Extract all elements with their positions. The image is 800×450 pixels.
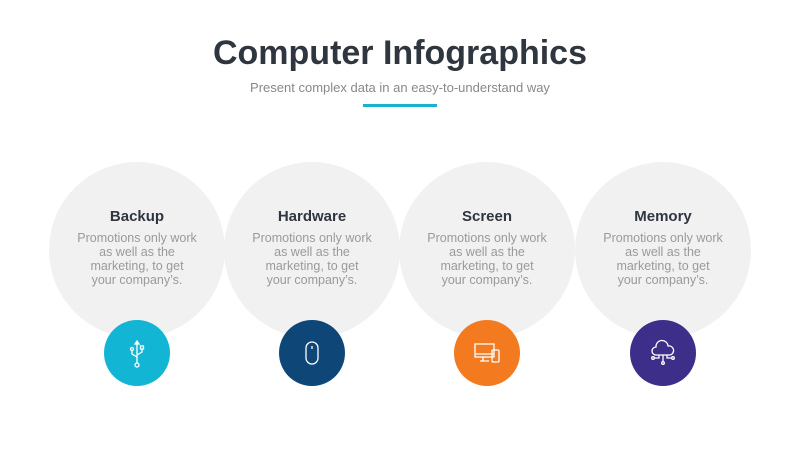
- panel: memory: as well as the: [625, 245, 701, 259]
- icon: cloud: [630, 320, 696, 386]
- panel: hardware: your company’s.: [267, 273, 357, 287]
- panel: backup: Promotions only work: [77, 231, 197, 245]
- icon: devices: [454, 320, 520, 386]
- panel: screen: [399, 162, 575, 338]
- panel: memory: [575, 162, 751, 338]
- icon: usb: [104, 320, 170, 386]
- panel: backup: marketing, to get: [90, 259, 184, 273]
- subtitle: Present complex data in an easy-to-understand way: [250, 80, 550, 95]
- panel: hardware: [224, 162, 400, 338]
- panel: screen: Promotions only work: [427, 231, 547, 245]
- panel: backup: [49, 162, 225, 338]
- panel: hardware: as well as the: [274, 245, 350, 259]
- panel: backup: as well as the: [99, 245, 175, 259]
- panel: hardware: Promotions only work: [252, 231, 372, 245]
- panel: screen: your company’s.: [442, 273, 532, 287]
- panel: memory: Memory: [634, 208, 692, 225]
- panel: backup: your company’s.: [92, 273, 182, 287]
- panel: memory: marketing, to get: [616, 259, 710, 273]
- panel: hardware: Hardware: [278, 208, 346, 225]
- icon: mouse: [279, 320, 345, 386]
- title: Computer Infographics: [213, 34, 587, 72]
- panel: screen: as well as the: [449, 245, 525, 259]
- panel: backup: Backup: [110, 208, 164, 225]
- panel: memory: your company’s.: [618, 273, 708, 287]
- panel: screen: Screen: [462, 208, 512, 225]
- accent line: [363, 104, 437, 107]
- panel: memory: Promotions only work: [603, 231, 723, 245]
- panel: screen: marketing, to get: [440, 259, 534, 273]
- panel: hardware: marketing, to get: [265, 259, 359, 273]
